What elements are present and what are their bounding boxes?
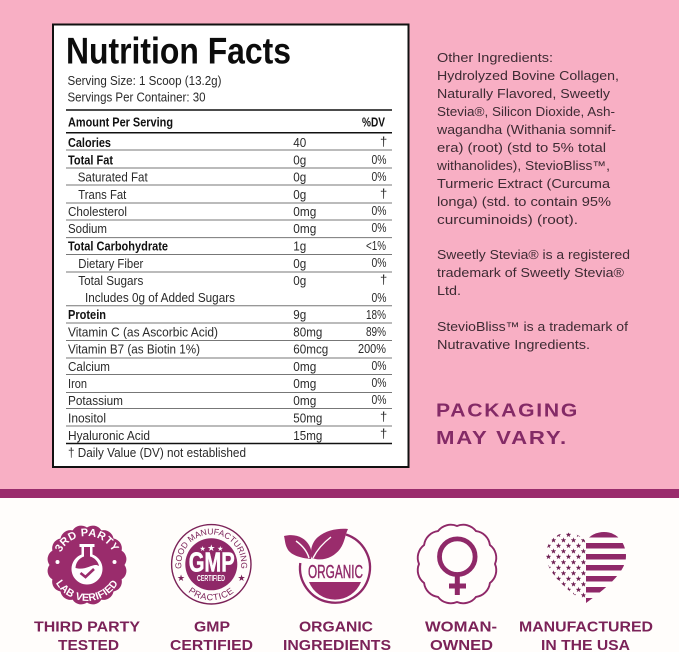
- nutrient labels: Hyaluronic Acid: [68, 428, 150, 443]
- nutrient labels: Saturated Fat: [78, 170, 148, 185]
- nutrient labels: Dietary Fiber: [78, 256, 144, 271]
- amount column: 0mg: [293, 376, 316, 391]
- nutrient labels: Vitamin B7 (as Biotin 1%): [68, 342, 200, 357]
- nutrient labels: Potassium: [68, 393, 123, 408]
- serving information: Servings Per Container: 30: [68, 90, 206, 105]
- heading: nutrition facts: Nutrition Facts: [66, 30, 291, 71]
- serving information: [68, 73, 222, 105]
- text block: sweetly stevia trademark: Ltd.: [437, 284, 461, 298]
- amount column: 50mg: [293, 411, 322, 426]
- amount column: 0g: [293, 153, 306, 168]
- label: third party tested: THIRD PARTY: [34, 619, 140, 636]
- amount column: 1g: [293, 239, 306, 254]
- amount column: 40: [293, 135, 306, 150]
- icon: gmp certified seal: ★: [217, 545, 223, 553]
- icon: organic leaf circle: ORGANIC: [308, 562, 363, 582]
- text block: sweetly stevia trademark: trademark of Sweetly Stevia®: [437, 266, 625, 280]
- percent daily value column: †: [380, 409, 387, 424]
- icon: gmp certified seal: GOOD MANUFACTURING: [175, 528, 248, 568]
- amount column: 60mcg: [293, 342, 328, 357]
- table header: Amount Per Serving: [68, 115, 173, 130]
- amount column: 0g: [293, 170, 306, 185]
- percent daily value column: 0%: [372, 169, 387, 184]
- icon: gmp certified seal: ★: [200, 545, 206, 553]
- percent daily value column: †: [380, 272, 387, 287]
- percent daily value column: 18%: [366, 307, 386, 322]
- label: organic ingredients: ORGANIC: [299, 619, 373, 636]
- percent daily value column: 0%: [372, 255, 387, 270]
- icon: gmp certified seal: ★: [207, 543, 215, 553]
- text block: other ingredients: curcuminoids) (root).: [437, 213, 578, 227]
- icon: gmp certified seal: ★: [237, 573, 246, 583]
- percent daily value column: 0%: [372, 220, 387, 235]
- percent daily value column: 0%: [372, 392, 387, 407]
- table header: %DV: [362, 115, 385, 130]
- percent daily value column: 0%: [372, 358, 387, 373]
- callout: packaging may vary: MAY VARY.: [436, 427, 568, 448]
- amount column: [293, 135, 328, 443]
- text block: other ingredients: wagandha (Withania somnif-: [436, 123, 616, 137]
- nutrient labels: Total Carbohydrate: [68, 239, 168, 254]
- label: manufactured in the usa: MANUFACTURED: [519, 619, 653, 636]
- nutrient labels: Protein: [68, 307, 106, 322]
- nutrient labels: Calcium: [68, 359, 110, 374]
- text block: other ingredients: withanolides), StevioBliss™,: [436, 159, 610, 173]
- label: gmp certified: [170, 619, 253, 652]
- percent daily value column: †: [380, 186, 387, 201]
- percent daily value column: 0%: [372, 203, 387, 218]
- icon: third party lab verified badge: LAB VERIFIED: [56, 579, 117, 601]
- callout: packaging may vary: PACKAGING: [436, 400, 579, 421]
- amount column: 0mg: [293, 359, 316, 374]
- nutrient labels: Cholesterol: [68, 204, 127, 219]
- text block: other ingredients: Hydrolyzed Bovine Collagen,: [437, 69, 619, 83]
- nutrient labels: Calories: [68, 135, 111, 150]
- nutrient labels: [68, 135, 235, 443]
- background: pink upper area: [0, 0, 679, 489]
- icon: gmp certified seal: [170, 524, 252, 605]
- nutrient labels: Sodium: [68, 221, 107, 236]
- icon: american flag heart: [546, 532, 628, 603]
- icon: gmp certified seal: GMP: [189, 547, 235, 578]
- percent daily value column: 0%: [372, 290, 387, 305]
- percent daily value column: [358, 134, 387, 441]
- label: manufactured in the usa: [519, 619, 653, 652]
- percent daily value column: 89%: [366, 324, 386, 339]
- nutrient labels: Iron: [68, 376, 87, 391]
- label: woman-owned: WOMAN-: [425, 619, 497, 636]
- amount column: 0g: [293, 256, 306, 271]
- amount column: 0g: [293, 273, 306, 288]
- divider band: [0, 489, 679, 498]
- amount column: 9g: [293, 307, 306, 322]
- amount column: 80mg: [293, 325, 322, 340]
- percent daily value column: <1%: [366, 238, 386, 253]
- text block: steviobliss trademark: [437, 320, 629, 352]
- amount column: 0mg: [293, 393, 316, 408]
- label: woman-owned: [425, 619, 497, 652]
- icon: organic leaf circle: [284, 529, 370, 603]
- footnote: † Daily Value (DV) not established: [68, 445, 246, 460]
- amount column: 0g: [293, 187, 306, 202]
- nutrient labels: Includes 0g of Added Sugars: [85, 290, 235, 305]
- text block: sweetly stevia trademark: Sweetly Stevia® is a registered: [437, 248, 630, 262]
- percent daily value column: 200%: [358, 341, 386, 356]
- percent daily value column: 0%: [372, 152, 387, 167]
- label: organic ingredients: [283, 619, 391, 652]
- nutrient labels: Vitamin C (as Ascorbic Acid): [68, 325, 218, 340]
- amount column: 0mg: [293, 221, 316, 236]
- text block: steviobliss trademark: Nutravative Ingredients.: [437, 338, 590, 352]
- text block: other ingredients: Stevia®, Silicon Dioxide, Ash-: [437, 105, 615, 119]
- table header: [68, 115, 385, 130]
- text block: other ingredients: [436, 51, 619, 227]
- text block: steviobliss trademark: StevioBliss™ is a trademark of: [437, 320, 629, 334]
- callout: packaging may vary: [436, 400, 579, 448]
- text block: other ingredients: era) (root) (std to 5% total: [437, 141, 606, 155]
- background: off-white lower area: [0, 498, 679, 652]
- label: gmp certified: GMP: [194, 619, 230, 636]
- percent daily value column: 0%: [372, 375, 387, 390]
- icon: third party lab verified badge: [48, 526, 126, 604]
- icon: woman-owned badge: [418, 525, 496, 603]
- text block: other ingredients: longa) (std. to contain 95%: [437, 195, 611, 209]
- percent daily value column: †: [380, 134, 387, 149]
- nutrient labels: Total Fat: [68, 153, 114, 168]
- nutrient labels: Inositol: [68, 411, 106, 426]
- serving information: Serving Size: 1 Scoop (13.2g): [68, 73, 222, 88]
- text block: other ingredients: Turmeric Extract (Curcuma: [437, 177, 610, 191]
- icon: gmp certified seal: CERTIFIED: [197, 574, 225, 583]
- panel: nutrition facts: [53, 24, 408, 467]
- percent daily value column: †: [380, 426, 387, 441]
- icon: third party lab verified badge: 3RD PARTY: [55, 528, 120, 552]
- amount column: 15mg: [293, 428, 322, 443]
- amount column: 0mg: [293, 204, 316, 219]
- nutrient labels: Trans Fat: [78, 187, 127, 202]
- label: third party tested: [34, 619, 140, 652]
- icon: gmp certified seal: ★: [177, 573, 185, 583]
- text block: other ingredients: Naturally Flavored, Sweetly: [437, 87, 611, 101]
- text block: sweetly stevia trademark: [437, 248, 630, 298]
- icon: gmp certified seal: PRACTICE: [188, 587, 234, 600]
- nutrient labels: Total Sugars: [78, 273, 144, 288]
- text block: other ingredients: Other Ingredients:: [437, 51, 553, 65]
